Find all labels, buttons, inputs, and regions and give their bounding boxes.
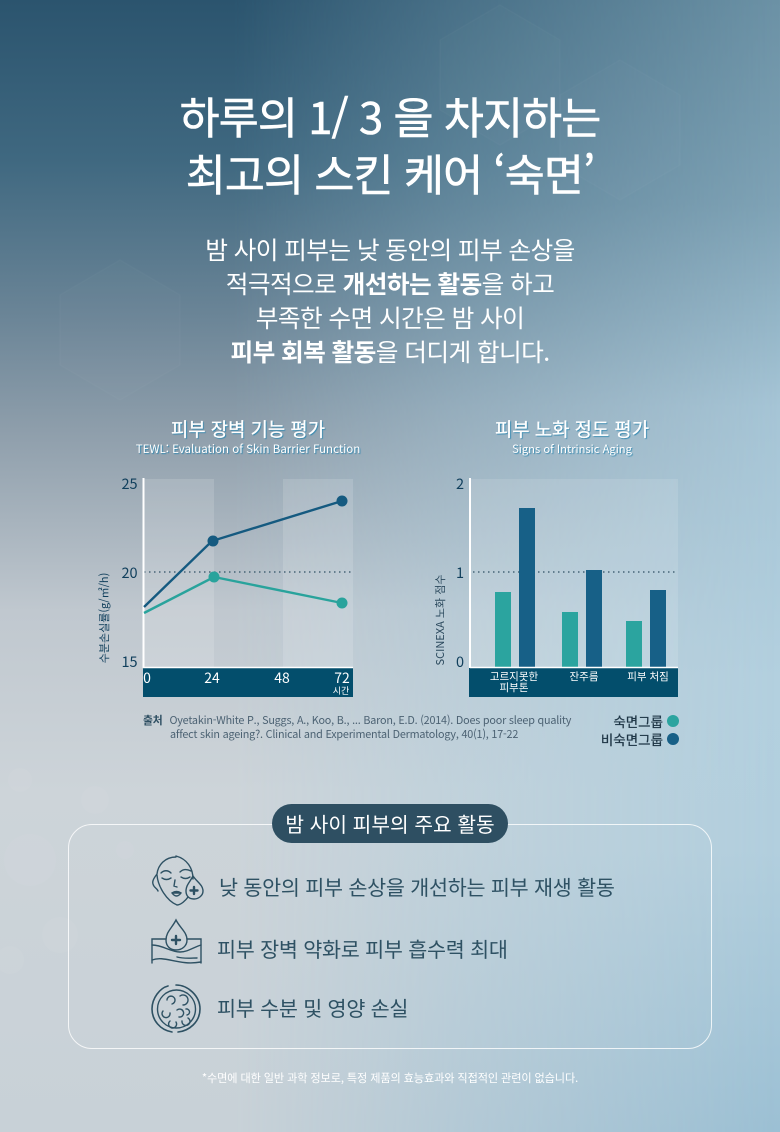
icon: barrier with drop [151,918,202,964]
line chart: skin barrier [96,473,353,697]
text: absorption: 피부 장벽 약화로 피부 흡수력 최대 [217,933,508,963]
title: 하루의 1/ 3 을 차지하는 [180,84,600,147]
title: 최고의 스킨 케어 ‘숙면’ [186,141,594,204]
heading: barrier chart: TEWL: Evaluation of Skin Barrier Function [136,441,360,457]
icon: skin cells [151,984,201,1033]
footnote: *수면에 대한 일반 과학 정보로, 특정 제품의 효능효과와 직접적인 관련이 없습니다. [202,1070,578,1086]
bar chart: intrinsic aging [432,473,678,697]
panel heading pill: 밤 사이 피부의 주요 활동 [285,808,495,838]
heading: aging chart [495,415,650,457]
source citation [143,712,572,742]
line chart: skin barrier: 15 [121,651,138,672]
bar chart: intrinsic aging: SCINEXA 노화 점수 [432,575,448,665]
bar chart: intrinsic aging: 2 [456,473,464,494]
intro text: 밤 사이 피부는 낮 동안의 피부 손상을 [205,231,575,267]
bar chart: intrinsic aging: 피부 처짐 [627,669,669,684]
bar chart: intrinsic aging: 0 [456,651,464,672]
heading: barrier chart [136,415,361,457]
panel heading pill [272,804,508,843]
intro text: 적극적으로 개선하는 활동을 하고 [226,265,554,301]
text: moisture loss: 피부 수분 및 영양 손실 [217,992,408,1022]
title [180,84,600,204]
intro text: 피부 회복 활동을 더디게 합니다. [230,333,550,369]
intro text: 부족한 수면 시간은 밤 사이 [256,299,524,335]
bar chart: intrinsic aging: 잔주름 [570,669,599,684]
text: skin regeneration: 낮 동안의 피부 손상을 개선하는 피부 재생 활동 [219,871,615,901]
line chart: skin barrier: 24 [204,668,220,688]
heading: barrier chart: 피부 장벽 기능 평가 [171,415,325,442]
line chart: skin barrier: 0 [143,668,151,688]
line chart: skin barrier: 72 [334,668,350,688]
line chart: skin barrier: 25 [121,473,138,494]
source citation: 출처 Oyetakin-White P., Suggs, A., Koo, B., ... Baron, E.D. (2014). Does poor sleep quality [143,712,571,728]
bar chart: intrinsic aging: 피부톤 [500,680,529,695]
intro text [205,231,575,369]
icon: face with drop [152,855,204,906]
line chart: skin barrier: 48 [274,668,290,688]
heading: aging chart: 피부 노화 정도 평가 [495,415,649,442]
panel: night skin activities [68,824,712,1049]
legend [601,711,679,749]
legend: 숙면그룹 [613,711,663,731]
legend: 비숙면그룹 [601,729,663,749]
bar chart: intrinsic aging: 1 [456,562,464,583]
line chart: skin barrier: 20 [121,562,138,583]
source citation: affect skin ageing?. Clinical and Experimental Dermatology, 40(1), 17-22 [170,726,518,742]
line chart: skin barrier: 수분손실률(g/㎡/h) [96,573,112,663]
heading: aging chart: Signs of Intrinsic Aging [512,441,632,457]
bar chart: intrinsic aging: 고르지못한 [490,669,538,684]
line chart: skin barrier: 시간 [333,684,349,697]
